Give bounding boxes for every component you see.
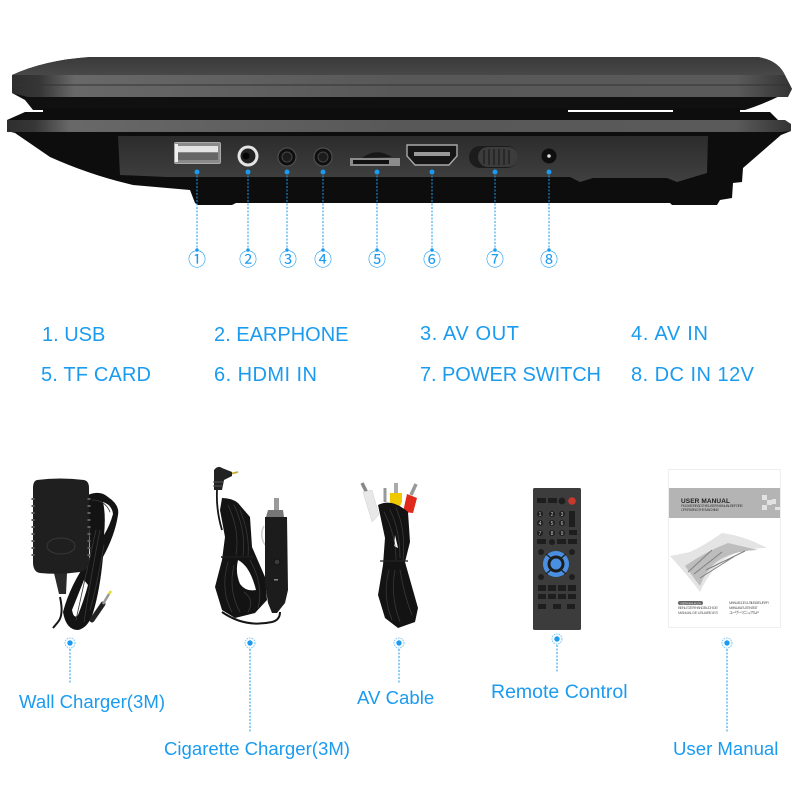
callout 6: ⑥ <box>423 246 441 272</box>
leader line: AV cable <box>398 649 400 684</box>
device base <box>7 112 791 205</box>
device: portable DVD player side view <box>7 57 792 205</box>
marker: cigarette charger <box>245 638 255 648</box>
legend item 6: 6. HDMI IN <box>214 364 317 386</box>
port legend list <box>41 323 755 386</box>
legend item 7: 7. POWER SWITCH <box>420 364 601 386</box>
leader line: user manual <box>726 649 728 733</box>
remote digit labels: 7 <box>539 531 542 537</box>
port callouts with numbered markers <box>188 170 558 272</box>
accessory: user manual: BENUTZERHANDBUCH.DE <box>678 605 718 610</box>
callout 4: ④ <box>314 246 332 272</box>
leader line: cigarette charger <box>249 649 251 733</box>
callout 5 <box>368 170 386 272</box>
accessory: user manual: MANUAL DE USUARIO.ES <box>678 610 718 615</box>
accessory: user manual: OPERATING THE MACHINE <box>681 507 719 512</box>
accessory: user manual: MANUALE UTENTE.IT <box>729 605 759 610</box>
callout 3 <box>279 170 297 272</box>
accessory: user manual <box>668 470 780 648</box>
accessory: wall charger <box>33 478 118 648</box>
label: wall charger: Wall Charger(3M) <box>19 691 165 712</box>
label: AV cable: AV Cable <box>357 687 434 708</box>
port: TF card <box>350 152 400 166</box>
accessory: user manual: MANUEL DE L'UTILISATEUR.FR <box>729 600 769 605</box>
remote digit labels <box>539 512 564 537</box>
remote digit labels: 1 <box>539 512 542 518</box>
port: power switch <box>469 146 518 168</box>
cigarette plug <box>262 498 288 613</box>
callout 8 <box>540 170 558 272</box>
legend item 5: 5. TF CARD <box>41 364 151 386</box>
callout 2: ② <box>239 246 257 272</box>
accessory: remote control <box>533 488 581 644</box>
callout 1: ① <box>188 246 206 272</box>
port: DC in <box>542 148 556 164</box>
accessory: user manual: USER MANUAL <box>681 498 730 505</box>
remote digit labels: 9 <box>561 531 564 537</box>
accessory: user manual: PLEASE READ THIS USER MANUAL BEFORE <box>681 503 743 508</box>
callout 3: ③ <box>279 246 297 272</box>
leader line: remote control <box>556 645 558 673</box>
remote digit labels: 6 <box>561 521 564 527</box>
port: earphone <box>238 146 258 166</box>
dark joint between lid and base <box>43 108 568 114</box>
device base band <box>7 120 791 132</box>
accessory: user manual: USER MANUAL.EN <box>680 602 701 606</box>
marker: remote control <box>552 634 562 644</box>
accessory: user manual: ユーザーマニュアル.JP <box>729 609 759 615</box>
remote digit labels: 2 <box>551 512 554 518</box>
port panel <box>118 136 708 182</box>
port: AV out <box>278 148 296 166</box>
legend item 4: 4. AV IN <box>631 323 708 345</box>
label: cigarette charger: Cigarette Charger(3M) <box>164 738 350 759</box>
accessory: AV cable <box>362 483 418 648</box>
remote digit labels: 3 <box>561 512 564 518</box>
remote digit labels: 5 <box>551 521 554 527</box>
legend item 1: 1. USB <box>42 324 105 346</box>
port: USB <box>174 142 220 164</box>
port: AV in <box>314 148 332 166</box>
marker: user manual <box>722 638 732 648</box>
marker: wall charger <box>65 638 75 648</box>
callout 1 <box>188 170 206 272</box>
label: user manual: User Manual <box>673 738 778 759</box>
remote digit labels: 8 <box>551 531 554 537</box>
marker: AV cable <box>394 638 404 648</box>
callout 4 <box>314 170 332 272</box>
callout 5: ⑤ <box>368 246 386 272</box>
remote digit labels: 4 <box>539 521 542 527</box>
callout 7: ⑦ <box>486 246 504 272</box>
label: remote control: Remote Control <box>491 681 628 703</box>
callout 2 <box>239 170 257 272</box>
legend item 8: 8. DC IN 12V <box>631 364 755 386</box>
callout 8: ⑧ <box>540 246 558 272</box>
accessory: cigarette charger <box>213 467 288 648</box>
leader line: wall charger <box>69 649 71 684</box>
device lid <box>12 57 792 110</box>
legend item 3: 3. AV OUT <box>420 323 519 345</box>
legend item 2: 2. EARPHONE <box>214 324 348 346</box>
callout 6 <box>423 170 441 272</box>
port: HDMI <box>407 145 457 165</box>
callout 7 <box>486 170 504 272</box>
